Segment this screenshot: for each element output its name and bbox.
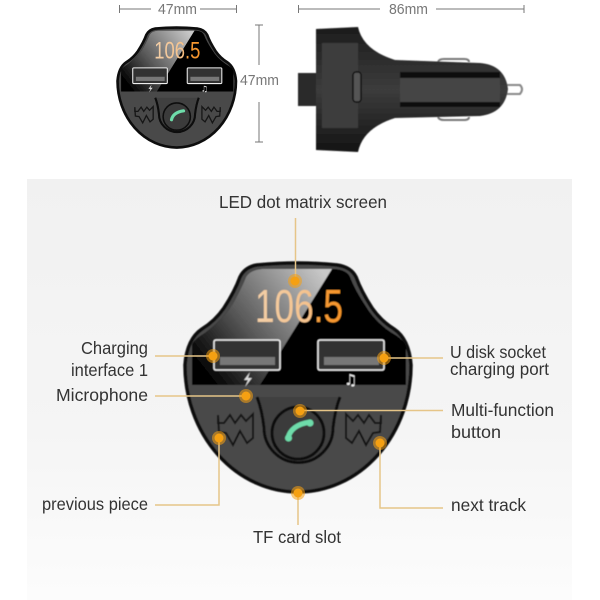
label: LED dot matrix screen: LED dot matrix screen (219, 192, 387, 212)
label: Charging interface 1 (71, 338, 148, 380)
dimension: side length 86mm: 86mm (389, 2, 428, 18)
multi-function button (272, 407, 324, 459)
label: U disk socket charging port: charging port (450, 359, 549, 379)
button trough (257, 397, 340, 462)
USB port right (318, 340, 384, 370)
label: Charging interface 1: interface 1 (71, 360, 148, 380)
dimension: side length 86mm (298, 2, 524, 18)
label: Multi-function button: Multi-function (451, 400, 554, 420)
dimension: front width 47mm: 47mm (158, 2, 197, 18)
icon: music note: ♫ (344, 371, 357, 389)
dimension: front height 47mm (240, 25, 279, 142)
label: Multi-function button: button (451, 422, 501, 442)
small device front view: ♫ (201, 84, 208, 93)
black screen area (192, 269, 406, 385)
label: previous piece: previous piece (42, 494, 148, 514)
icon: phone (285, 420, 314, 442)
callout lines (155, 218, 443, 525)
icon: next wave (346, 414, 381, 445)
label: Microphone: Microphone (56, 385, 148, 405)
LED reading: 106.5 (255, 280, 343, 332)
label: next track: next track (451, 495, 526, 515)
label: U disk socket charging port (450, 342, 549, 379)
dimension: front height 47mm: 47mm (240, 73, 279, 89)
label: Multi-function button (451, 400, 554, 442)
label: Charging interface 1: Charging (81, 338, 148, 358)
callout dots (206, 274, 391, 500)
label: U disk socket charging port: U disk socket (450, 342, 546, 362)
background panel (27, 179, 572, 600)
main device front view (185, 263, 411, 492)
label: TF card slot: TF card slot (253, 527, 341, 547)
screen glare (192, 269, 332, 385)
small device front view: 106.5 (154, 37, 200, 64)
dimension: front width 47mm (120, 2, 236, 18)
USB port left (214, 340, 280, 370)
small device side view (298, 27, 522, 152)
small device front view (118, 28, 236, 148)
device body (185, 263, 411, 492)
icon: lightning (244, 372, 252, 387)
icon: previous wave (218, 414, 253, 445)
